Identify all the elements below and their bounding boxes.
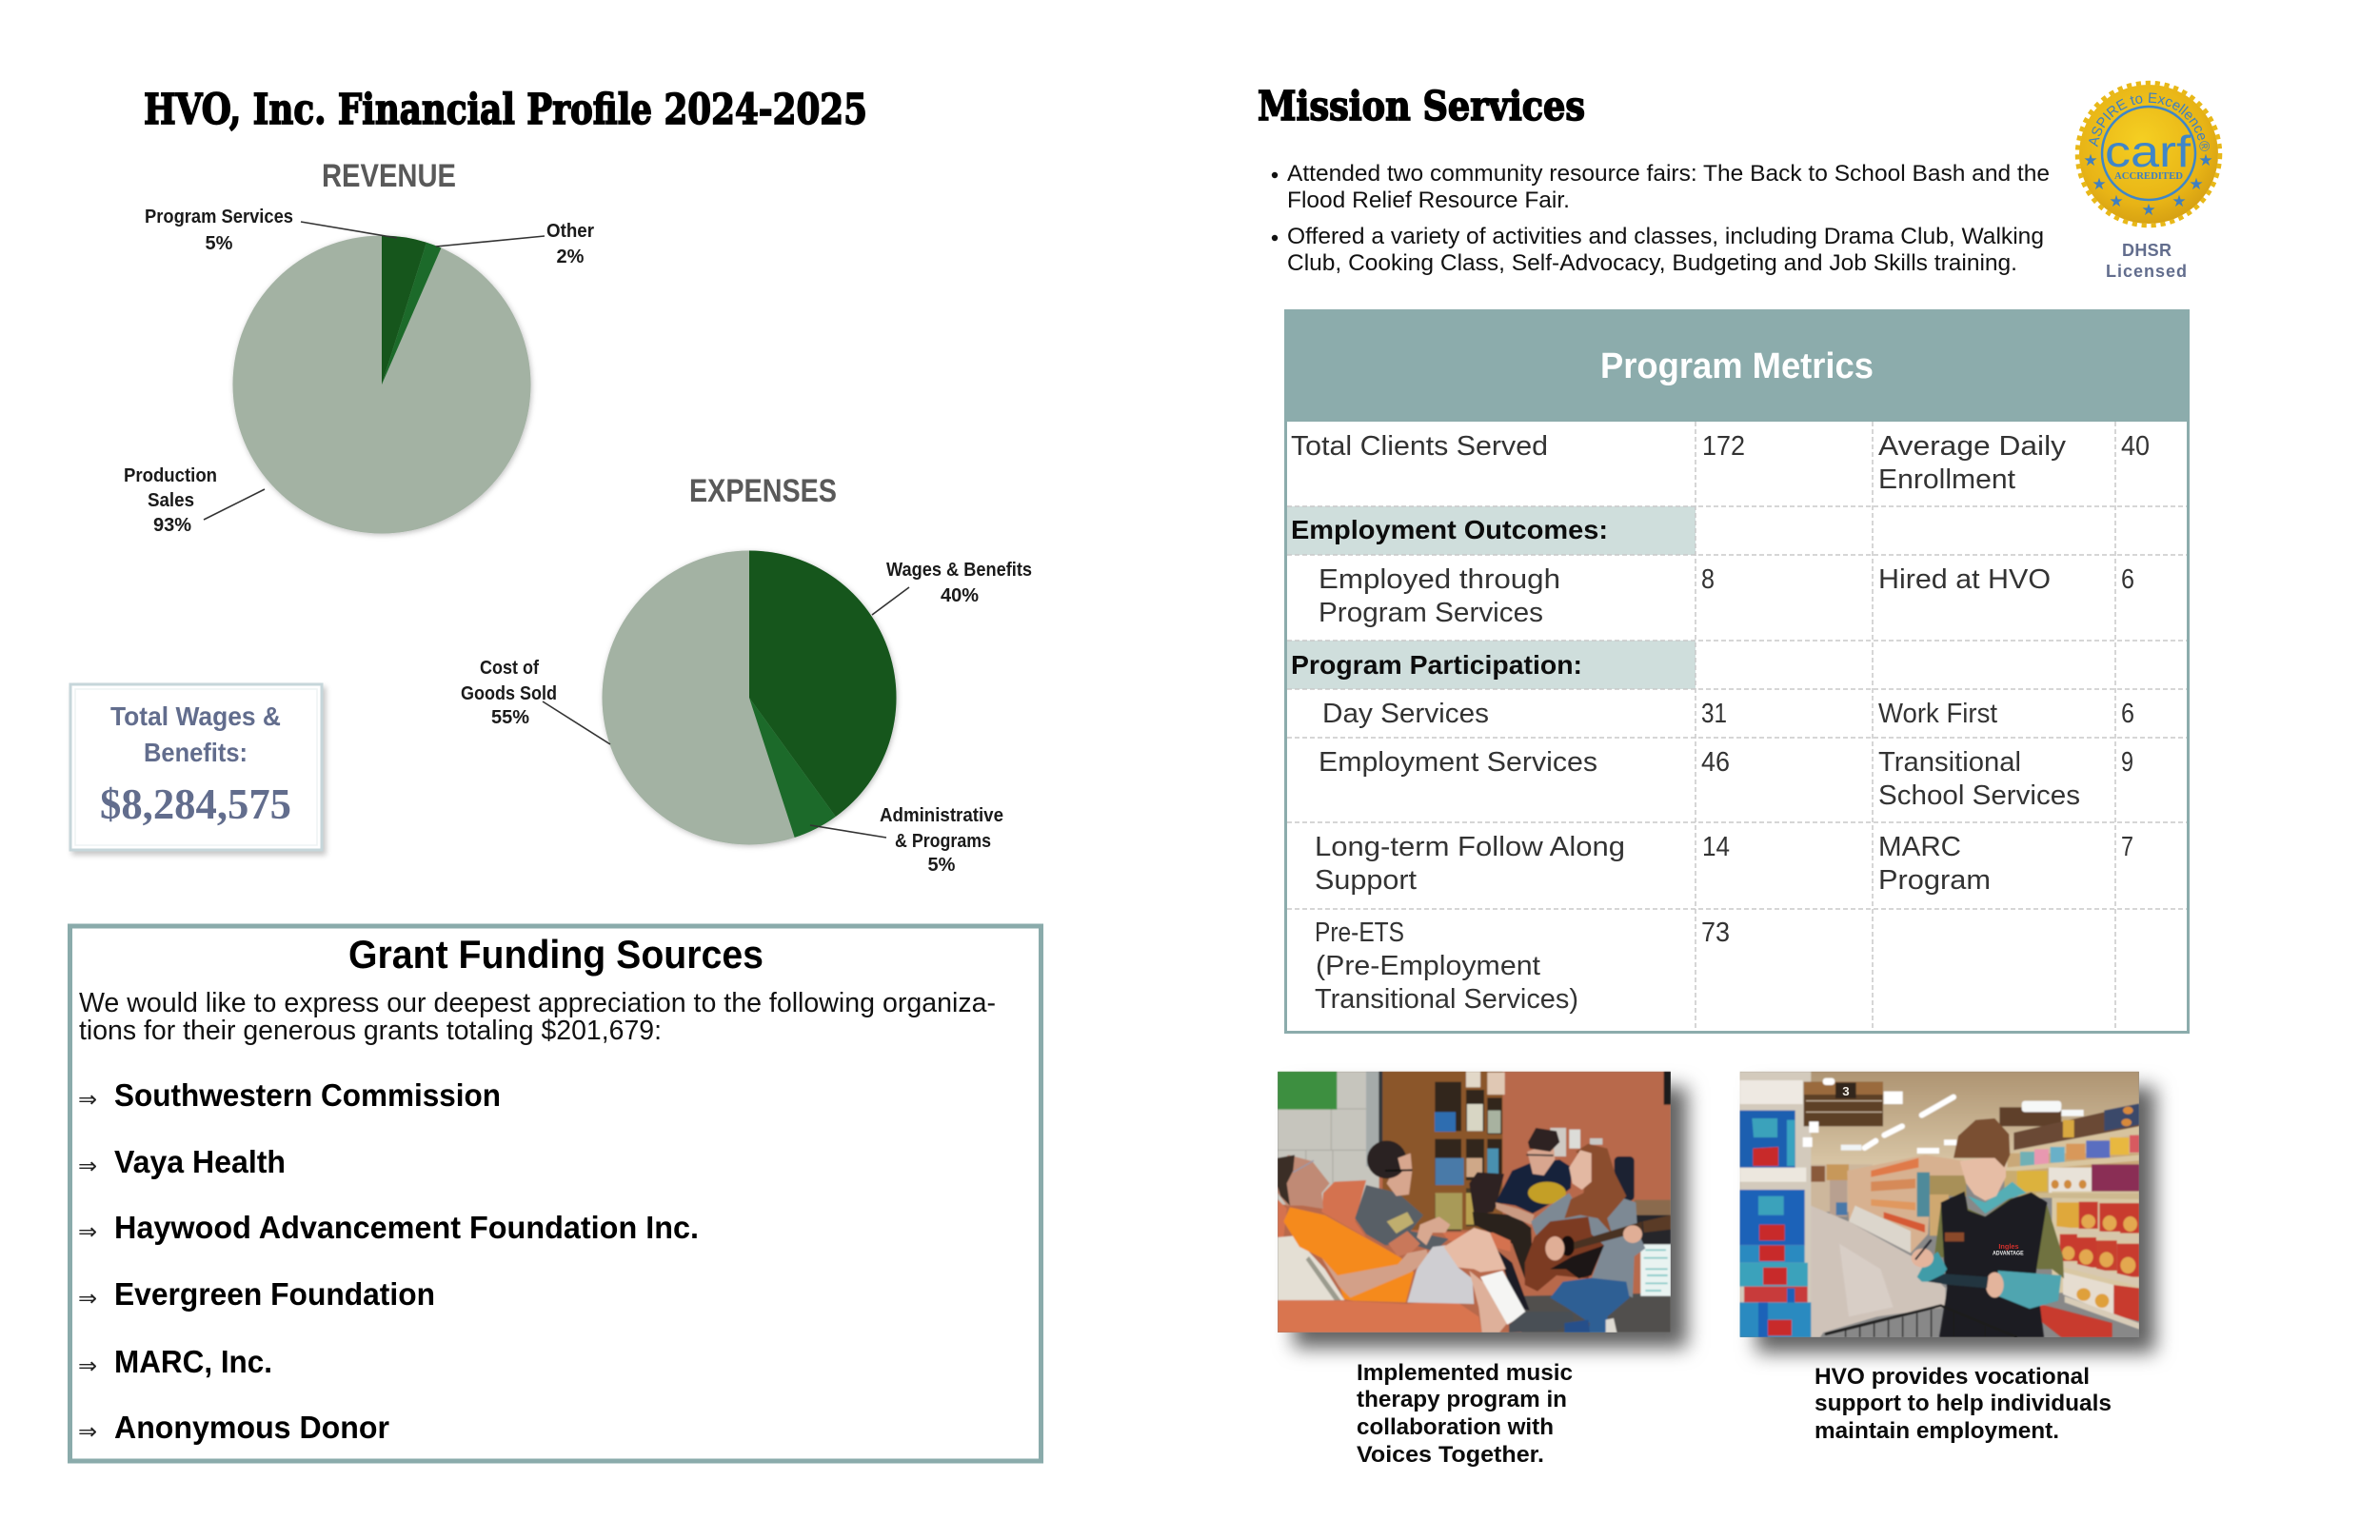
- row: employment services: Transitional: [1878, 747, 2021, 778]
- caption: vocational support: support to help individuals: [1815, 1391, 2112, 1416]
- label: administrative and programs: & Programs: [895, 831, 991, 852]
- heading: revenue: REVENUE: [322, 158, 456, 194]
- label: other: Other: [546, 221, 594, 242]
- icon: carf accreditation seal: ASPIRE to Excellence®: [2089, 92, 2210, 151]
- text block: mission bullets: Club, Cooking Class, Self-Advocacy, Budgeting and Job Skills training.: [1287, 250, 2017, 276]
- row: employment services: 9: [2121, 747, 2133, 778]
- photo: music therapy group: [1278, 1072, 1671, 1333]
- pie slices: expenses: [602, 550, 897, 845]
- row: total clients: 172: [1702, 431, 1745, 462]
- label: cost of goods sold: 55%: [491, 707, 529, 728]
- text block: grant introduction: We would like to express our deepest appreciation to the following organiza-: [79, 988, 996, 1018]
- heading: mission services: Mission Services: [1258, 83, 1585, 129]
- caption: vocational support: [1815, 1364, 2112, 1444]
- label: other: [436, 221, 594, 267]
- row: long-term follow along: 7: [2121, 832, 2133, 862]
- label: program services: 5%: [206, 233, 233, 254]
- row: total clients: Average Daily: [1878, 431, 2067, 462]
- list: grant funders: MARC, Inc.: [114, 1344, 272, 1379]
- label: production sales: Production: [124, 465, 217, 486]
- text block: mission bullets: [1272, 161, 2050, 276]
- row: employed through program services: 6: [2121, 564, 2134, 595]
- label: cost of goods sold: Cost of: [480, 658, 539, 679]
- text block: mission bullets: Attended two community resource fairs: The Back to School Bash and the: [1287, 161, 2050, 187]
- photo: vocational support in grocery store: 3: [1842, 1084, 1850, 1098]
- label: administrative and programs: 5%: [928, 855, 956, 876]
- label: other: 2%: [557, 247, 585, 267]
- label: program services: Program Services: [145, 207, 293, 227]
- label: administrative and programs: Administrative: [880, 805, 1003, 826]
- row: pre-ets: Pre-ETS: [1315, 918, 1404, 948]
- list: grant funders: Evergreen Foundation: [114, 1276, 435, 1312]
- list: grant funders: Haywood Advancement Foundation Inc.: [114, 1210, 699, 1245]
- label: dhsr licensed: Licensed: [2106, 262, 2187, 281]
- row: pre-ets: 73: [1701, 918, 1730, 948]
- label: cost of goods sold: [461, 658, 610, 744]
- icon: carf accreditation seal: [2075, 80, 2222, 228]
- icon: carf accreditation seal: ★: [2189, 175, 2204, 194]
- row: employment services: 46: [1701, 747, 1730, 778]
- list: grant funders: [78, 1077, 699, 1445]
- row: employed through program services: Program Services: [1319, 598, 1543, 628]
- row: day services: 31: [1701, 699, 1727, 729]
- row: day services: [1322, 699, 2134, 729]
- row: long-term follow along: 14: [1702, 832, 1730, 862]
- row: employed through program services: Employed through: [1319, 564, 1560, 595]
- list: grant funders: Vaya Health: [114, 1144, 286, 1179]
- pie slices: revenue: [232, 235, 531, 533]
- icon: carf accreditation seal: ★: [2092, 175, 2107, 194]
- row: total clients: Enrollment: [1878, 464, 2015, 495]
- row: employed through program services: Hired at HVO: [1878, 564, 2051, 595]
- callout: total wages and benefits: Benefits:: [144, 738, 248, 767]
- label: administrative and programs: [810, 805, 1003, 876]
- label: dhsr licensed: DHSR: [2122, 241, 2172, 260]
- caption: music therapy: collaboration with: [1357, 1414, 1554, 1440]
- row: employment services: Employment Services: [1319, 747, 1597, 778]
- caption: music therapy: Voices Together.: [1357, 1442, 1544, 1468]
- list: grant funders: ⇒: [78, 1352, 97, 1379]
- row: total clients: [1291, 431, 2150, 495]
- caption: vocational support: maintain employment.: [1815, 1418, 2059, 1444]
- list: grant funders: ⇒: [78, 1153, 97, 1179]
- label: production sales: [124, 465, 265, 536]
- icon: carf accreditation seal: carf: [2105, 127, 2191, 176]
- pie chart: revenue: [124, 207, 594, 536]
- label: wages and benefits: 40%: [941, 585, 979, 606]
- caption: music therapy: therapy program in: [1357, 1387, 1567, 1412]
- icon: carf accreditation seal: ★: [2083, 151, 2098, 170]
- label: production sales: 93%: [153, 515, 191, 536]
- panel: grant funding sources: [70, 926, 1041, 1461]
- section heading: program participation: Program Participation:: [1291, 650, 1582, 680]
- section heading: employment outcomes: Employment Outcomes:: [1291, 515, 1608, 544]
- text block: grant introduction: [79, 988, 996, 1046]
- row: long-term follow along: Program: [1878, 865, 1991, 896]
- caption: music therapy: Implemented music: [1357, 1360, 1573, 1386]
- label: wages and benefits: Wages & Benefits: [886, 560, 1032, 581]
- row: employed through program services: 8: [1701, 564, 1715, 595]
- row: day services: Day Services: [1322, 699, 1489, 729]
- label: cost of goods sold: Goods Sold: [461, 683, 557, 704]
- callout: total wages and benefits: [70, 684, 322, 850]
- label: dhsr licensed: [2106, 241, 2187, 281]
- label: program services: [145, 207, 397, 254]
- list: grant funders: Southwestern Commission: [114, 1077, 501, 1113]
- table header: Program Metrics: [1600, 346, 1874, 386]
- row: day services: 6: [2121, 699, 2134, 729]
- list: grant funders: ⇒: [78, 1418, 97, 1445]
- icon: carf accreditation seal: ACCREDITED: [2114, 171, 2183, 182]
- label: production sales: Sales: [148, 490, 194, 511]
- text block: grant introduction: tions for their generous grants totaling $201,679:: [79, 1016, 662, 1046]
- text block: mission bullets: Offered a variety of activities and classes, including Drama Club, Walking: [1287, 224, 2044, 249]
- table: program metrics: [1284, 309, 2189, 1032]
- icon: carf accreditation seal: ★: [2172, 192, 2187, 211]
- photo: vocational support in grocery store: ADVANTAGE: [1993, 1251, 2024, 1257]
- callout: total wages and benefits: Total Wages &: [110, 701, 281, 731]
- row: long-term follow along: Support: [1315, 865, 1417, 896]
- callout: total wages and benefits: $8,284,575: [100, 780, 291, 828]
- row: employed through program services: [1319, 564, 2134, 628]
- row: total clients: 40: [2121, 431, 2150, 462]
- icon: carf accreditation seal: ★: [2109, 192, 2124, 211]
- icon: carf accreditation seal: ★: [2198, 151, 2213, 170]
- photo: vocational support in grocery store: [1739, 1072, 2139, 1337]
- row: pre-ets: [1315, 918, 1730, 1015]
- table header: [1284, 309, 2189, 422]
- heading: expenses: EXPENSES: [689, 473, 837, 509]
- photo: vocational support in grocery store: Ingles: [1998, 1242, 2019, 1251]
- row: day services: Work First: [1878, 699, 1997, 729]
- row: employment services: [1319, 747, 2133, 811]
- icon: carf accreditation seal: ★: [2141, 201, 2156, 220]
- pie chart: expenses: [461, 550, 1032, 876]
- caption: music therapy: [1357, 1360, 1573, 1468]
- list: grant funders: ⇒: [78, 1285, 97, 1312]
- section shading: [1287, 506, 1696, 689]
- row: employment services: School Services: [1878, 780, 2080, 811]
- label: wages and benefits: [872, 560, 1032, 615]
- list: grant funders: ⇒: [78, 1086, 97, 1113]
- row: long-term follow along: [1315, 832, 2133, 896]
- title: financial profile: HVO, Inc. Financial Profile 2024-2025: [144, 86, 867, 134]
- heading: grant funding sources: Grant Funding Sources: [348, 932, 764, 977]
- row: total clients: Total Clients Served: [1291, 431, 1548, 462]
- text block: mission bullets: Flood Relief Resource Fair.: [1287, 188, 1570, 213]
- list: grant funders: Anonymous Donor: [114, 1410, 389, 1445]
- row: long-term follow along: MARC: [1878, 832, 1961, 862]
- list: grant funders: ⇒: [78, 1218, 97, 1245]
- row: long-term follow along: Long-term Follow Along: [1315, 832, 1625, 862]
- caption: vocational support: HVO provides vocational: [1815, 1364, 2090, 1390]
- row: pre-ets: Transitional Services): [1315, 984, 1578, 1015]
- row: pre-ets: (Pre-Employment: [1316, 951, 1540, 981]
